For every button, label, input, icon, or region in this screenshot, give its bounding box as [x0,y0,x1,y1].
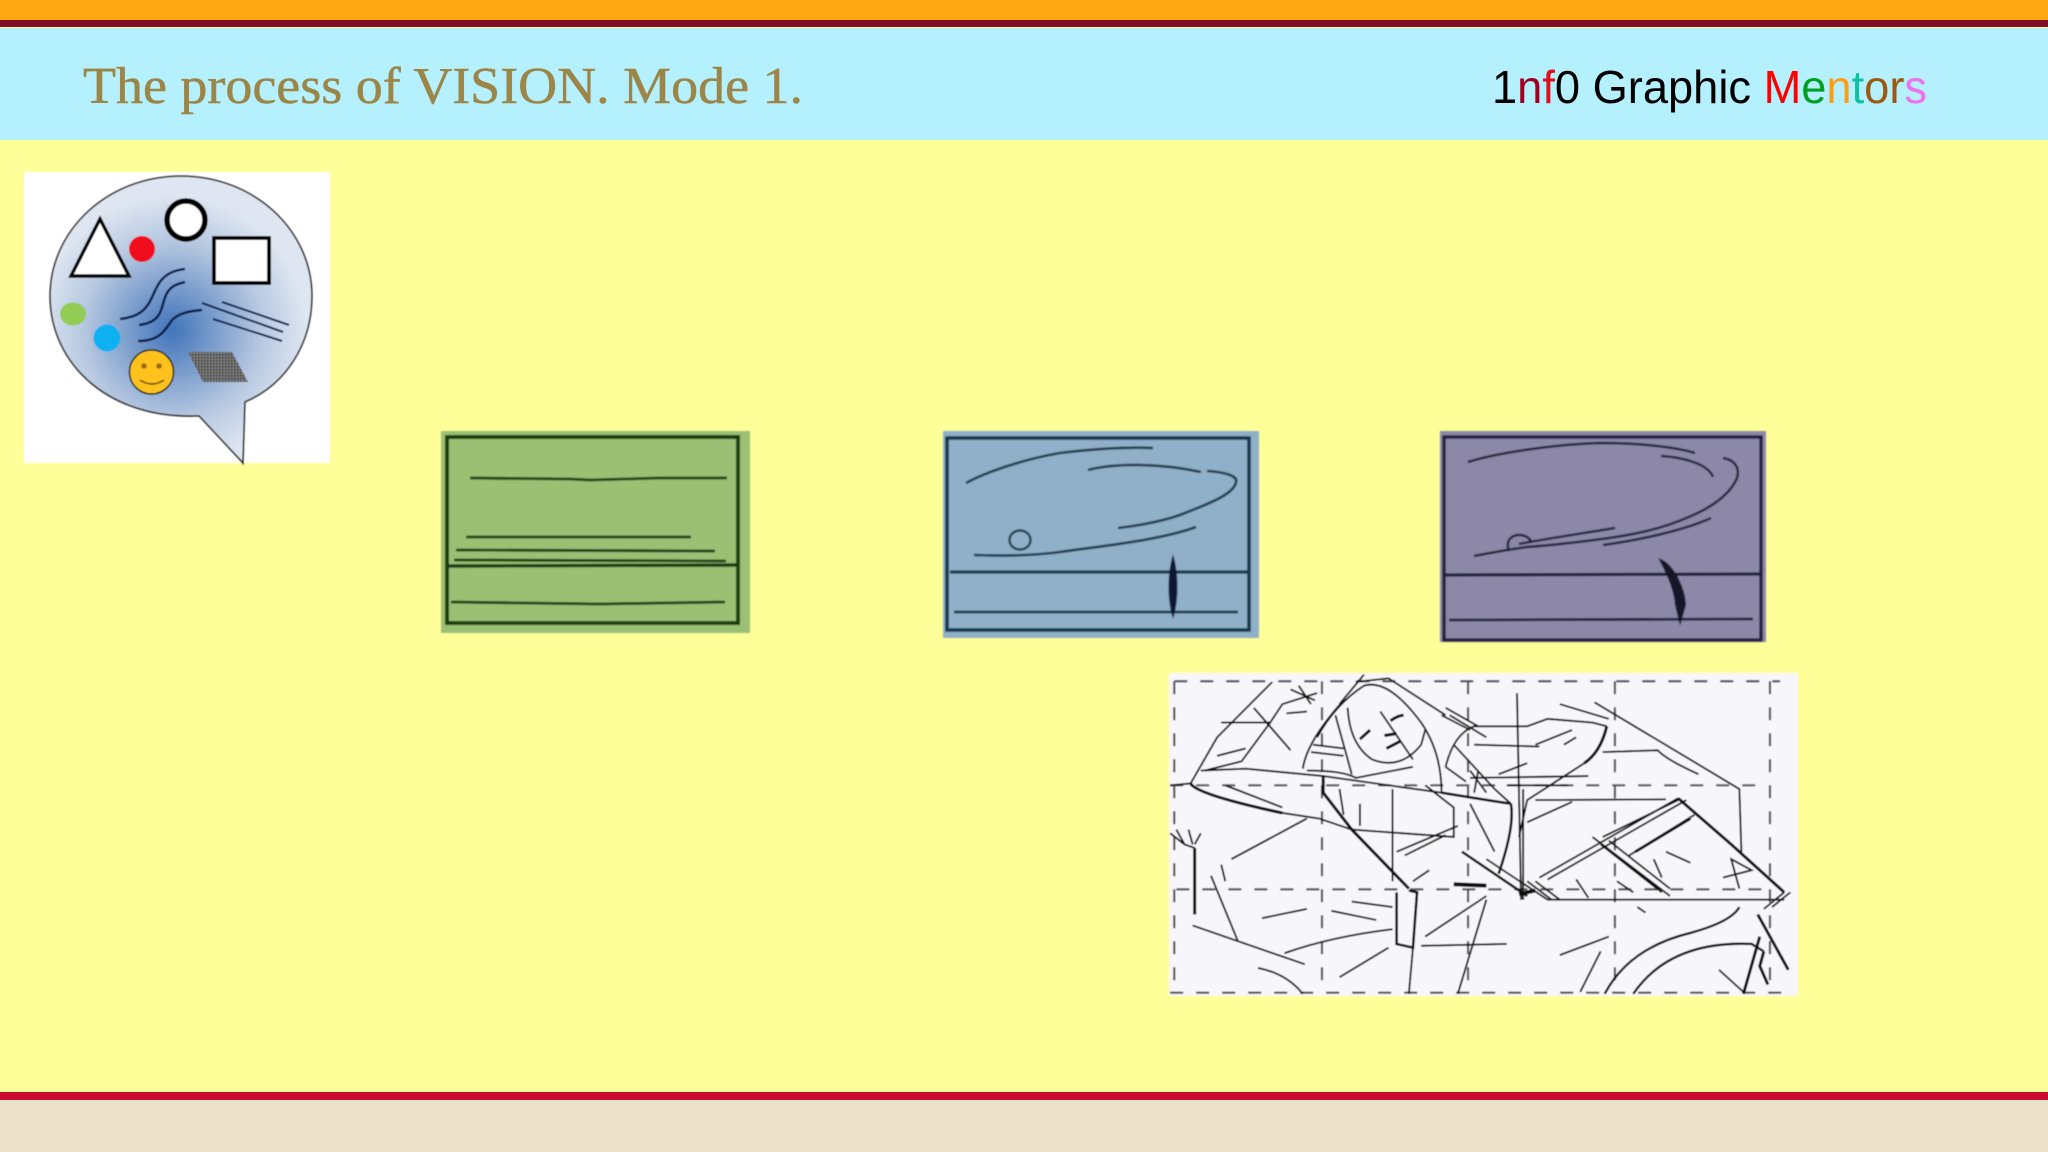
red dot [129,236,155,262]
bottom red band [0,1092,2048,1100]
frame [447,437,738,623]
curved lines [966,448,1236,556]
panel: green sketch [441,431,750,633]
header band [0,28,2048,140]
curved mark [1658,558,1686,626]
figure drawing lines [1170,675,1790,994]
horizon line [447,565,738,566]
icon: speech bubble with shapes [24,172,330,463]
green dot [60,302,86,326]
horizon line [950,570,1249,574]
top orange band [0,0,2048,20]
bubble outline [50,176,312,463]
footer band [0,1100,2048,1152]
triangle [71,219,129,276]
hatched parallelogram [188,352,248,382]
panel: purple sketch [1440,431,1766,642]
circle [167,201,205,239]
panel: figure sketch [1169,673,1798,996]
curved lines [1468,443,1738,556]
small circle [1010,530,1030,550]
blue dot [94,324,120,352]
drawn lines [451,478,727,604]
brand name: 1nf0 Graphic Mentors [1492,61,1927,113]
frame [947,438,1249,630]
smiley [130,350,174,394]
panel: blue sketch [943,431,1259,638]
title: The process of VISION. Mode 1. [83,58,803,115]
dashed grid [1170,681,1788,993]
dark red band [0,20,2048,27]
square [214,238,269,283]
wavy lines [120,269,289,341]
vertical mark [1168,554,1178,619]
frame [1444,437,1761,640]
horizon line [1444,574,1761,575]
